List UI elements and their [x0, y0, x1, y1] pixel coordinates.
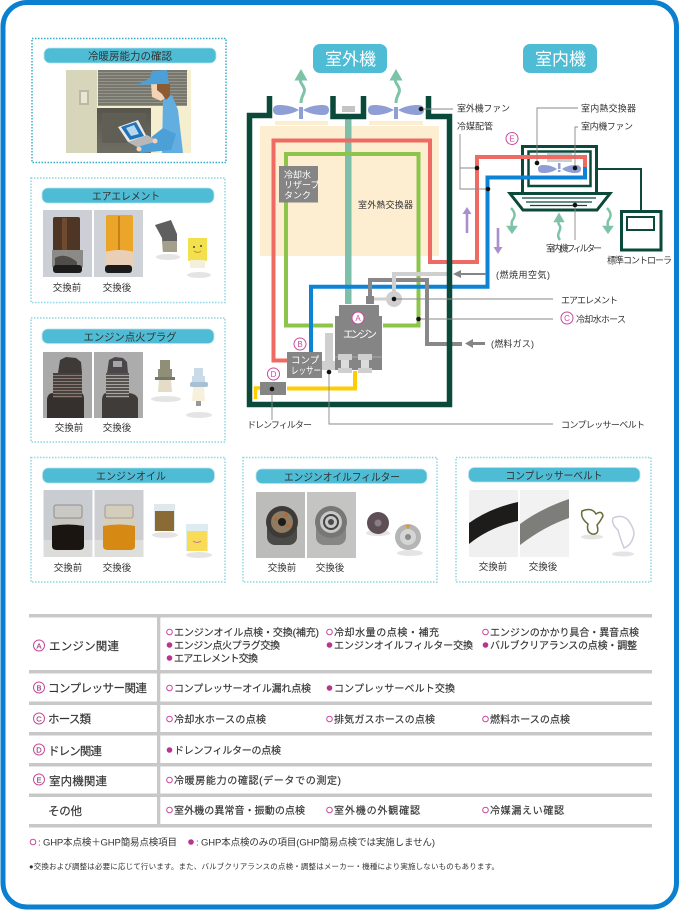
character: dirty oil filter: [366, 512, 390, 536]
row: ホース類: [34, 713, 570, 726]
combustion air arrow: (燃焼用空気): [496, 269, 550, 280]
badge: 室外機: 室外機: [325, 50, 376, 69]
engine: [335, 305, 382, 373]
heading: エンジンオイル: [42, 468, 214, 483]
panel: エンジンオイルフィルター: [243, 458, 437, 582]
character: dirty spark plug: [151, 360, 181, 402]
row: コンプレッサー関連: B: [36, 684, 42, 692]
indoor cabinet: [522, 146, 596, 192]
badge C: C: [564, 314, 570, 323]
row: ドレン関連: ドレンフィルターの点検: [174, 744, 281, 757]
row: ホース類: ホース類: [48, 713, 92, 726]
row: エンジン関連: [34, 626, 639, 665]
compressor: コンプ: [291, 356, 320, 366]
photo: after spark plug: [94, 352, 143, 418]
photo: after engine oil: [94, 490, 144, 557]
row: 室内機関連: 冷暖房能力の確認(データでの測定): [174, 774, 341, 787]
row: ドレン関連: ドレン関連: [48, 744, 102, 758]
row: コンプレッサー関連: [34, 681, 455, 695]
badge A: A: [355, 314, 361, 323]
fan hub grey: [342, 106, 355, 112]
exhaust arrow left: [297, 72, 305, 103]
photo: after oil filter: [307, 492, 356, 558]
inner box: [528, 152, 590, 186]
heading: エンジンオイル: エンジンオイル: [96, 470, 166, 482]
photo: before engine oil: [44, 490, 92, 557]
refrigerant flow arrow down: [494, 228, 502, 254]
row: ドレン関連: D: [36, 746, 42, 754]
photo: before spark plug: [43, 352, 92, 418]
diagram labels: 標準コントローラ: [607, 254, 672, 266]
diagram labels: コンプレッサーベルト: [561, 420, 645, 430]
diagram labels: 室内熱交換器: [581, 102, 636, 114]
diagram labels: ドレンフィルター: [247, 420, 312, 430]
caption: 交換前: 交換前: [55, 422, 83, 434]
character: clean air element: [187, 238, 211, 278]
caption: 交換前: 交換前: [479, 561, 507, 573]
row: エンジン関連: エンジンオイル点検・交換(補充): [174, 626, 319, 639]
caption: 交換後: 交換後: [103, 282, 132, 294]
row: 室内機関連: E: [36, 776, 42, 784]
airflow arrow right: [604, 208, 612, 232]
badge C: [561, 312, 573, 324]
legend: : GHP本点検＋GHP簡易点検項目: [38, 836, 177, 848]
row: コンプレッサー関連: コンプレッサーオイル漏れ点検: [174, 682, 311, 695]
indoor unit: [508, 146, 661, 250]
fuel gas arrow: [465, 338, 534, 349]
row: ホース類: C: [36, 714, 42, 724]
row: エンジン関連: エンジンのかかり具合・異音点検: [490, 626, 639, 639]
diagram labels: 室内機フィルター: [546, 242, 602, 254]
drain pipe yellow: [287, 371, 355, 388]
row: 室内機関連: [34, 774, 341, 788]
fan left: [273, 105, 329, 119]
panel: エンジン点火プラグ: [31, 318, 225, 442]
coolant pipe teal: [345, 118, 352, 304]
legend: : GHP本点検のみの項目(GHP簡易点検では実施しません): [196, 836, 435, 848]
refrigerant pipe red: [274, 140, 585, 360]
row: その他: 室外機の外観確認: [334, 804, 420, 817]
combustion air arrow: [453, 269, 550, 280]
combustion air pipe: [394, 274, 447, 294]
character: clean oil beaker: [186, 524, 212, 558]
caption: 交換前: 交換前: [268, 562, 296, 574]
reserve tank: 冷却水: [284, 169, 311, 180]
row: その他: その他: [48, 805, 82, 818]
caption: 交換後: 交換後: [529, 561, 558, 573]
outdoor unit diagram: [250, 72, 585, 404]
badge A: [352, 312, 364, 324]
character: clean oil filter: [395, 524, 423, 556]
refrigerant flow arrow up: [462, 207, 472, 233]
heading: エンジンオイルフィルター: エンジンオイルフィルター: [284, 472, 400, 484]
badge: 室内機: 室内機: [535, 50, 586, 69]
leader dots: [270, 107, 577, 391]
indoor fan: [538, 163, 581, 173]
row: コンプレッサー関連: コンプレッサーベルト交換: [334, 683, 455, 695]
caption: 交換前: 交換前: [53, 282, 81, 294]
heading: エンジン点火プラグ: エンジン点火プラグ: [84, 330, 177, 344]
heading: コンプレッサーベルト: [468, 468, 640, 482]
caption: 交換前: 交換前: [54, 562, 82, 574]
badge D: [268, 368, 280, 380]
row: エンジン関連: エンジンオイルフィルター交換: [334, 640, 473, 652]
row: ホース類: 冷却水ホースの点検: [174, 713, 266, 726]
reserve tank: リザーブ: [284, 179, 319, 190]
cooling water pipe green: [286, 154, 418, 326]
fan right: [368, 105, 424, 119]
caption: 交換後: 交換後: [316, 562, 345, 574]
row: 室内機関連: 室内機関連: [49, 774, 108, 788]
ceiling panel: [510, 194, 610, 210]
photo: after air element: [94, 210, 143, 277]
row: エンジン関連: 冷却水量の点検・補充: [334, 626, 439, 639]
photo: before belt: [469, 490, 518, 557]
air element: [366, 291, 402, 307]
panel: 冷暖房能力の確認: [32, 38, 226, 162]
diagram labels: 冷媒配管: [457, 120, 493, 132]
photo: before air element: [43, 210, 92, 277]
standard controller: [622, 212, 661, 250]
compressor belt: [322, 333, 335, 370]
diagram labels: [247, 102, 672, 430]
diagram labels: 冷却水ホース: [576, 314, 626, 324]
exhaust arrow right: [392, 72, 400, 103]
reserve tank: タンク: [284, 190, 311, 200]
photo: after belt: [520, 490, 569, 557]
badge E: E: [509, 134, 515, 144]
diagram labels: 室内機ファン: [581, 120, 633, 132]
row: エンジン関連: A: [36, 642, 42, 650]
row: ドレン関連: [34, 744, 281, 758]
character: dirty oil beaker: [152, 504, 178, 538]
inspection table: [29, 614, 652, 828]
row: その他: [48, 804, 564, 818]
row: ホース類: 燃料ホースの点検: [490, 713, 570, 726]
row: エンジン関連: エンジン点火プラグ交換: [174, 639, 280, 652]
heading: エアエレメント: エアエレメント: [92, 190, 160, 202]
fuel gas arrow: (燃料ガス): [491, 338, 534, 349]
character: dirty air element: [155, 220, 180, 260]
row: エンジン関連: エアエレメント交換: [174, 653, 258, 665]
airflow arrow center: [556, 215, 562, 240]
drain filter: [260, 382, 286, 395]
laptop: [118, 120, 147, 142]
diagram labels: 室外機ファン: [457, 102, 510, 114]
caption: 交換後: 交換後: [103, 422, 132, 434]
heat exchanger background: [260, 121, 439, 256]
badge D: D: [271, 370, 277, 379]
indoor pipe blue: [510, 167, 585, 178]
panel: エアエレメント: [31, 178, 225, 302]
worker: [162, 95, 183, 153]
heading: 冷暖房能力の確認: 冷暖房能力の確認: [88, 50, 172, 62]
refrigerant pipe blue: [311, 167, 585, 352]
row: エンジン関連: バルブクリアランスの点検・調整: [490, 639, 637, 652]
row: ホース類: 排気ガスホースの点検: [334, 713, 435, 726]
label: 室外熱交換器: 室外熱交換器: [358, 199, 413, 210]
character: clean spark plug: [186, 368, 212, 418]
compressor: [287, 352, 322, 378]
fuel gas pipe: [370, 280, 462, 344]
indoor pipe red: [510, 157, 585, 169]
controller cable: [598, 169, 641, 211]
row: エンジン関連: エンジン関連: [49, 639, 120, 653]
reserve tank: [279, 166, 319, 202]
heading: エンジンオイルフィルター: [256, 469, 427, 484]
leader lines: [272, 108, 578, 424]
heading: エアエレメント: [42, 188, 214, 203]
character: worn belt: [581, 510, 603, 540]
photo: before oil filter: [256, 492, 305, 558]
character: new belt: [612, 516, 634, 556]
illustration: worker checking unit with laptop: [66, 70, 191, 153]
legend: [30, 836, 435, 848]
indoor heat exchanger: [547, 153, 572, 162]
caption: 交換後: 交換後: [103, 562, 132, 574]
drain outlet: [256, 388, 260, 399]
compressor: レッサー: [291, 366, 321, 377]
heading: コンプレッサーベルト: コンプレッサーベルト: [506, 470, 602, 482]
row: その他: 冷媒漏えい確認: [490, 804, 564, 817]
heading: エンジン点火プラグ: [42, 329, 214, 344]
panel: コンプレッサーベルト: [456, 458, 651, 582]
badge B: B: [297, 340, 303, 349]
badge B: [294, 338, 306, 350]
footnote: ●交換および調整は必要に応じて行います。また、バルブクリアランスの点検・調整はメーカー・機種により実施しないものもあります。: [29, 861, 499, 871]
row: コンプレッサー関連: コンプレッサー関連: [48, 681, 148, 695]
row: その他: 室外機の異常音・振動の点検: [174, 804, 305, 817]
heading: 冷暖房能力の確認: [44, 48, 216, 63]
diagram labels: エアエレメント: [561, 296, 618, 306]
badge: 室外機: [313, 44, 387, 73]
outdoor cabinet: [250, 96, 450, 404]
airflow arrow left: [508, 208, 516, 232]
engine: エンジン: [343, 328, 377, 340]
badge E: [506, 132, 518, 144]
badge: 室内機: [523, 44, 597, 73]
panel: エンジンオイル: [31, 458, 225, 582]
table rules: [29, 614, 652, 828]
